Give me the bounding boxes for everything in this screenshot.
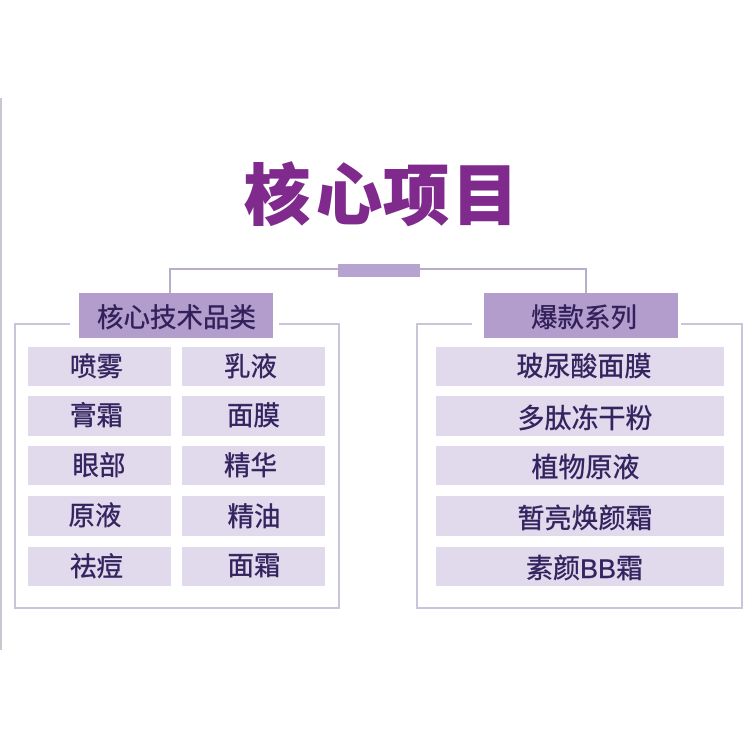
title: 项: [383, 159, 449, 233]
item: 暂亮焕颜霜: [436, 496, 724, 536]
title: [244, 159, 518, 233]
panel: best-selling series: [417, 293, 742, 608]
heading: best-selling series: [484, 293, 678, 338]
item: 膏霜: [28, 396, 171, 436]
item: 祛痘: 祛痘: [70, 552, 123, 582]
connector: tree lines to both categories: [170, 269, 586, 294]
item: 眼部: [28, 446, 171, 485]
item: 祛痘: [28, 547, 171, 586]
item: 精油: 精油: [228, 502, 280, 532]
item: 面膜: [182, 396, 325, 436]
panel frame right: [417, 324, 742, 608]
item: 玻尿酸面膜: 玻尿酸面膜: [516, 352, 652, 382]
item: 素颜BB霜: 素颜BB霜: [526, 554, 643, 584]
item: 多肽冻干粉: 多肽冻干粉: [518, 404, 652, 434]
panel: core technology categories: [15, 293, 339, 608]
item: 精华: [182, 446, 325, 485]
item: 植物原液: [436, 446, 724, 485]
item: 原液: [28, 496, 171, 536]
item: 面膜: 面膜: [227, 401, 280, 431]
heading: core technology categories: 核心技术品类: [97, 303, 256, 333]
item: 多肽冻干粉: [436, 396, 724, 436]
item: 精油: [182, 496, 325, 536]
title: 目: [452, 159, 518, 233]
item: 暂亮焕颜霜: 暂亮焕颜霜: [518, 504, 652, 534]
item: 素颜BB霜: [436, 547, 724, 586]
title: 心: [316, 159, 382, 233]
item: 膏霜: 膏霜: [70, 401, 123, 431]
heading: best-selling series: 爆款系列: [531, 303, 637, 333]
heading: core technology categories: [79, 293, 273, 338]
item: 乳液: [182, 347, 325, 386]
item: 喷雾: [28, 347, 171, 386]
item: 精华: 精华: [224, 451, 277, 481]
panel frame left: [15, 324, 339, 608]
item: 玻尿酸面膜: [436, 347, 724, 386]
item: 乳液: 乳液: [224, 352, 277, 382]
title: 核: [244, 159, 310, 233]
item: 面霜: 面霜: [228, 551, 280, 581]
item: 眼部: 眼部: [72, 451, 126, 481]
center node bar: [338, 264, 420, 277]
item: 原液: 原液: [68, 501, 122, 531]
item: 喷雾: 喷雾: [70, 352, 123, 382]
item: 面霜: [182, 547, 325, 586]
item: 植物原液: 植物原液: [532, 453, 640, 483]
